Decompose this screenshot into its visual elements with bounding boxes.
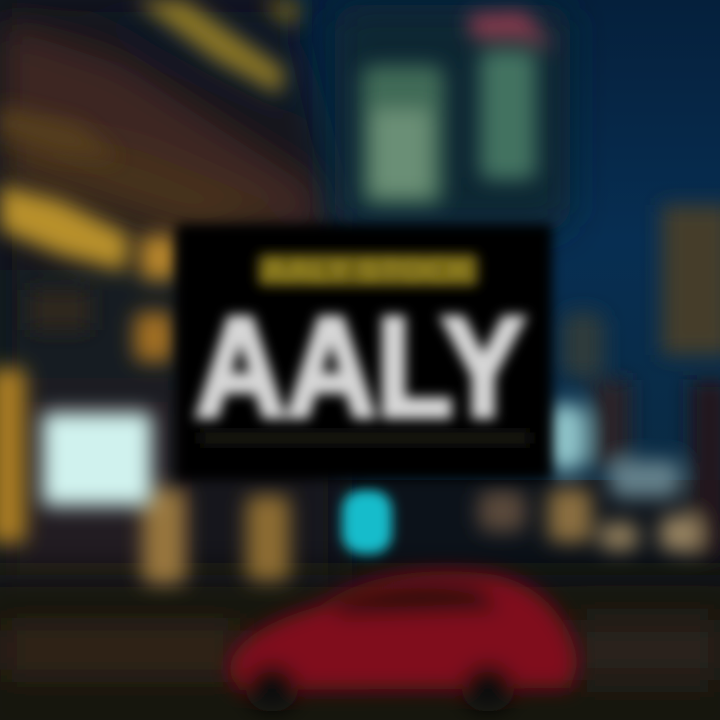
tower windows [362, 12, 555, 205]
right side lights [478, 205, 720, 560]
tower: centre [335, 5, 570, 230]
panel: central black sign [176, 224, 552, 480]
cyan light [342, 490, 392, 554]
gold facade lights [0, 0, 300, 362]
left shop lights [0, 368, 290, 584]
building: left [0, 0, 340, 600]
heading: AALY STOCK [263, 254, 473, 287]
subtitle line [200, 432, 530, 444]
red car [228, 571, 578, 712]
street level [0, 575, 720, 720]
sky [280, 0, 720, 480]
title text: AALY [195, 288, 525, 447]
panel: left white sign [42, 412, 152, 506]
